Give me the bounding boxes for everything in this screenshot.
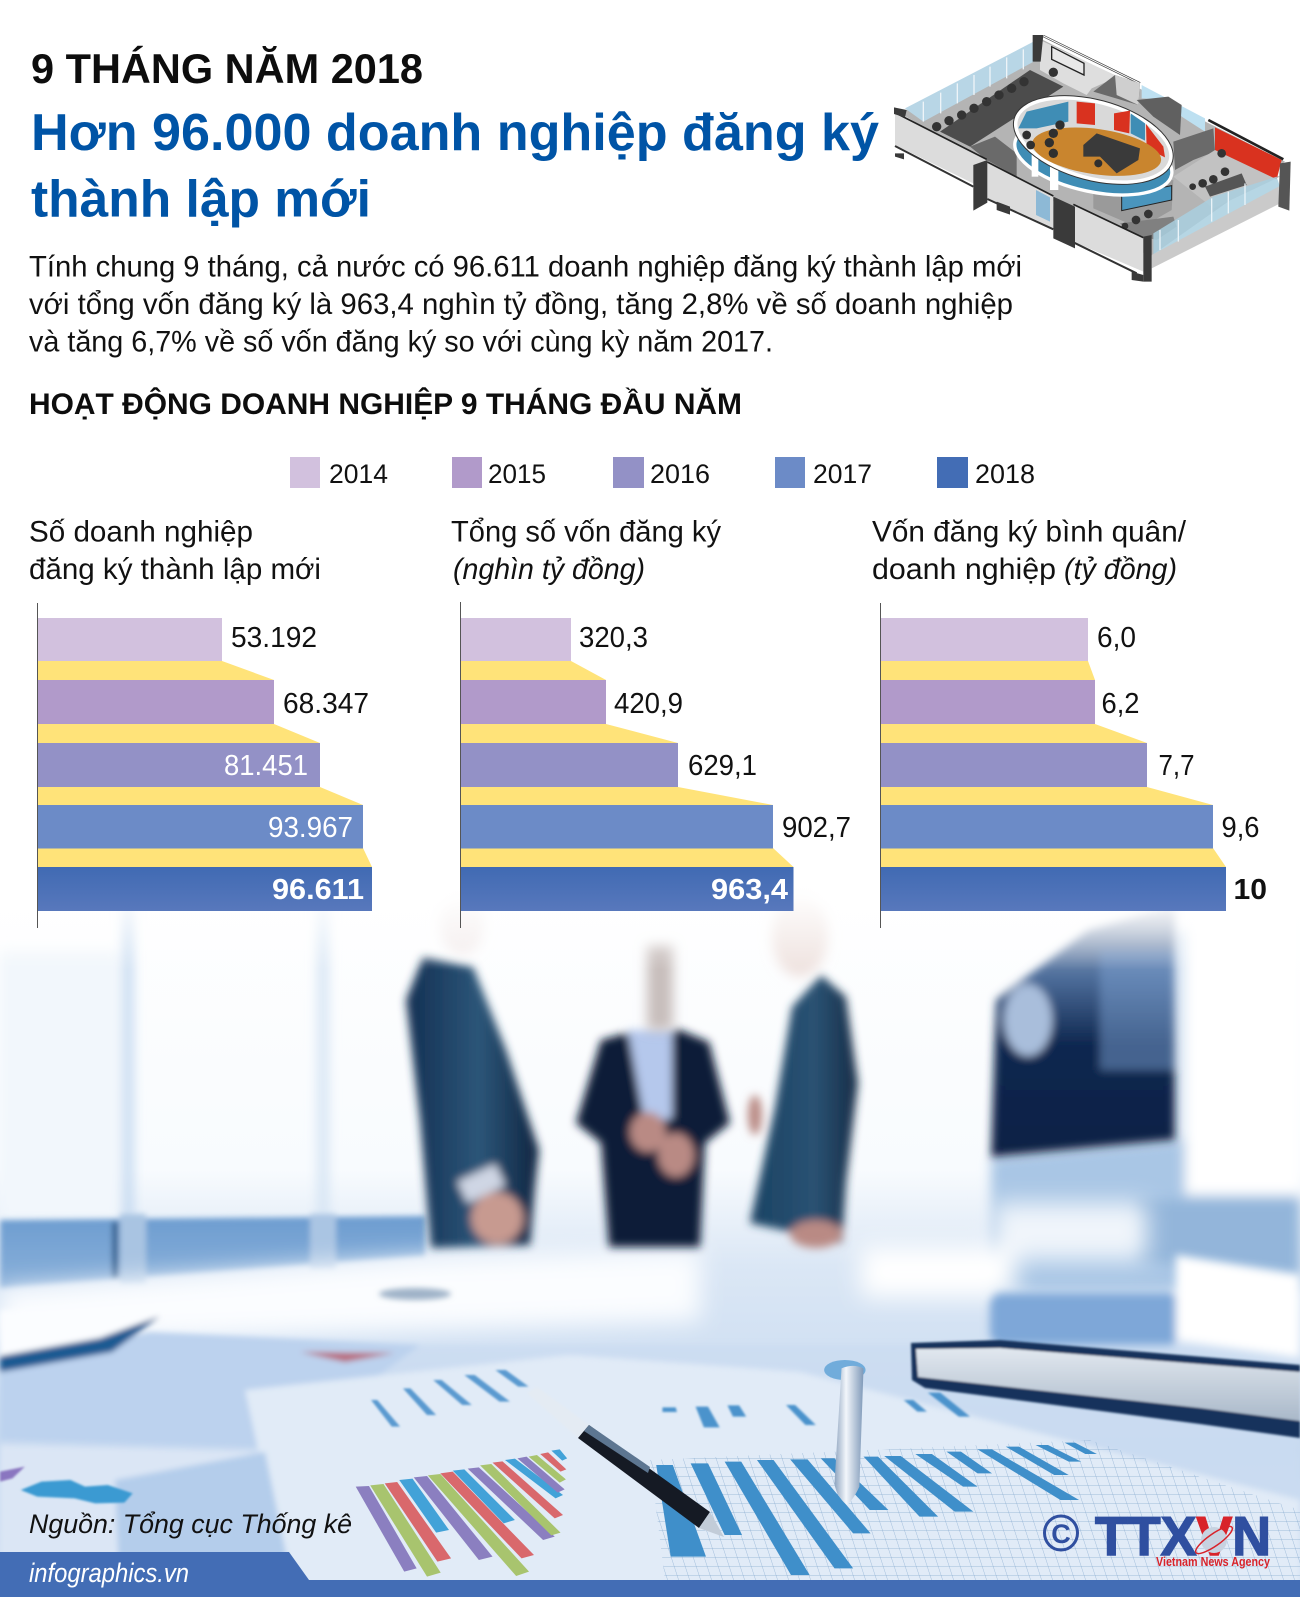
copyright mark: C [1051,1519,1071,1549]
intro paragraph: Tính chung 9 tháng, cả nước có 96.611 doanh nghiệp đăng ký thành lập mới [29,250,1022,284]
panel: new enterprises [29,516,372,928]
person centre [576,1030,730,1247]
blurred notebook top and white wedge [990,1255,1300,1358]
bar chart: 629,1 [688,750,757,782]
globe [1193,1522,1235,1558]
panel heading: Vốn đăng ký bình quân/ [872,516,1187,548]
panel heading: Tổng số vốn đăng ký [451,516,721,548]
panel heading [451,516,721,586]
website: infographics.vn [29,1558,189,1588]
bar chart: 93.967 [268,812,353,844]
office illustration [894,35,1291,282]
blurred office windows [0,900,1300,1290]
table surface and papers [0,1310,1300,1597]
bar chart: 9,6 [1222,812,1260,844]
chart on paper: small blurred bars [371,1370,970,1427]
panel heading: (tỷ đồng) [1064,553,1177,586]
pie chart on paper [0,1467,133,1503]
bar chart: 96.611 [272,874,364,906]
bar chart [37,603,372,928]
person right [750,975,858,1243]
panel heading: đăng ký thành lập mới [29,553,321,586]
title: headline: thành lập mới [31,170,371,228]
legend 2018 [937,457,1035,489]
copyright mark [1044,1516,1078,1550]
legend 2018: 2018 [975,459,1035,489]
legend 2014: 2014 [329,459,388,489]
section heading: HOẠT ĐỘNG DOANH NGHIỆP 9 THÁNG ĐẦU NĂM [29,387,742,421]
hands [471,1095,842,1248]
dark screen on the right wall [991,905,1175,1157]
gray smudge on the table [379,1288,451,1300]
title: headline: Hơn 96.000 doanh nghiệp đăng ký [31,104,879,162]
chart on paper: multicoloured bars [356,1449,567,1577]
panel heading [872,516,1187,586]
logo: TTXVN [1044,1505,1271,1569]
legend 2015 [452,457,546,489]
intro paragraph [29,250,1022,358]
bar chart: 68.347 [283,688,369,720]
panel heading: (nghìn tỷ đồng) [453,553,645,586]
legend [290,457,1035,489]
legend 2017 [775,457,872,489]
bar chart [880,603,1267,928]
title: kicker: 9 THÁNG NĂM 2018 [31,45,423,92]
footer tab [0,1552,309,1580]
legend 2015: 2015 [488,459,546,489]
bar chart: 6,2 [1102,688,1140,720]
bar chart: 420,9 [614,688,683,720]
bar chart: 6,0 [1097,622,1136,654]
legend 2014 [290,457,388,489]
legend 2016 [613,457,710,489]
intro paragraph: và tăng 6,7% về số vốn đăng ký so với cùng kỳ năm 2017. [29,326,773,358]
chart on paper: blue bars with grid [650,1440,1300,1580]
bar chart: 320,3 [579,622,648,654]
bar chart: 7,7 [1158,750,1194,782]
title: headline [31,104,879,228]
fade of photo into the white top [0,860,1300,970]
person centre shirt [628,1030,672,1125]
bar chart: 53.192 [231,622,317,654]
panel: total registered capital [451,516,851,928]
source: Nguồn: Tổng cục Thống kê [29,1509,352,1539]
panel heading: doanh nghiệp [872,553,1056,586]
left window band [0,1214,425,1288]
silver pen [824,1360,866,1505]
notebook [911,1340,1300,1438]
panel heading: Số doanh nghiệp [29,516,253,548]
black pen [527,1387,724,1537]
TTXVN wordmark: TTXVN [1095,1505,1271,1567]
round meeting room [1004,80,1183,208]
panel: average capital per enterprise [872,516,1267,928]
footer band [0,1552,1300,1597]
bar chart: 902,7 [782,812,851,844]
outer walls [895,113,987,190]
bar chart: 81.451 [224,750,308,782]
legend 2017: 2017 [813,459,872,489]
background photo: business people and charts on a table [0,860,1300,1597]
person left [406,957,539,1248]
bar chart: 10 [1234,874,1267,906]
bar chart: 963,4 [711,874,788,906]
blurred people [406,957,858,1248]
bar chart [460,602,851,928]
panel heading [29,516,321,586]
blurred table objects [0,1203,1147,1345]
intro paragraph: với tổng vốn đăng ký là 963,4 nghìn tỷ đồng, tăng 2,8% về số doanh nghiệp [29,288,1013,321]
legend 2016: 2016 [650,459,710,489]
agency name: Vietnam News Agency [1156,1555,1270,1569]
faint heads [440,893,828,1030]
